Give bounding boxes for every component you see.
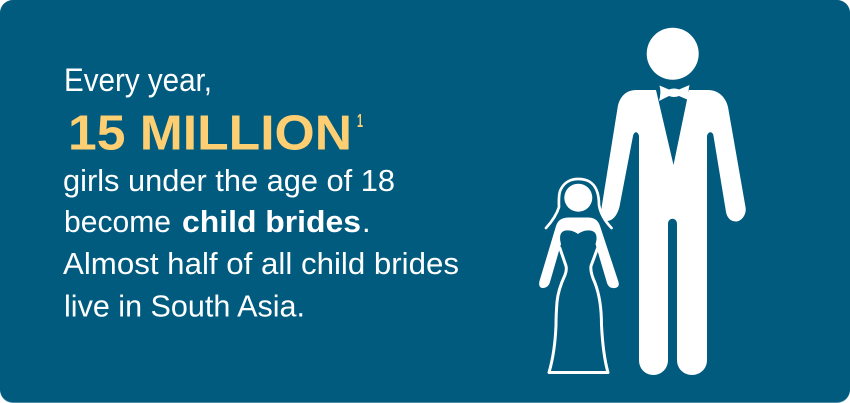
text: almost half: Almost half of all child brides	[63, 246, 459, 281]
text: girls under 18: girls under the age of 18	[63, 163, 395, 198]
groom head	[647, 28, 699, 80]
heading: 15 million: 15 MILLION	[68, 106, 352, 160]
text: become child brides: .	[362, 204, 371, 239]
text block: statistic	[63, 62, 459, 324]
groom bow tie	[659, 85, 690, 101]
text: south asia: live in South Asia.	[64, 288, 305, 324]
bride arms and bodice	[539, 218, 619, 288]
text: become child brides: child brides	[182, 204, 361, 239]
icon: groom	[601, 28, 746, 375]
text: intro: Every year,	[64, 62, 212, 98]
footnote marker: 1	[357, 111, 363, 131]
text: become child brides: become	[64, 204, 171, 239]
groom body	[601, 90, 746, 375]
bride head	[564, 184, 592, 212]
text: become child brides	[64, 204, 371, 239]
icon: bride	[539, 179, 619, 372]
bride veil	[546, 179, 612, 228]
bride dress	[549, 247, 608, 372]
